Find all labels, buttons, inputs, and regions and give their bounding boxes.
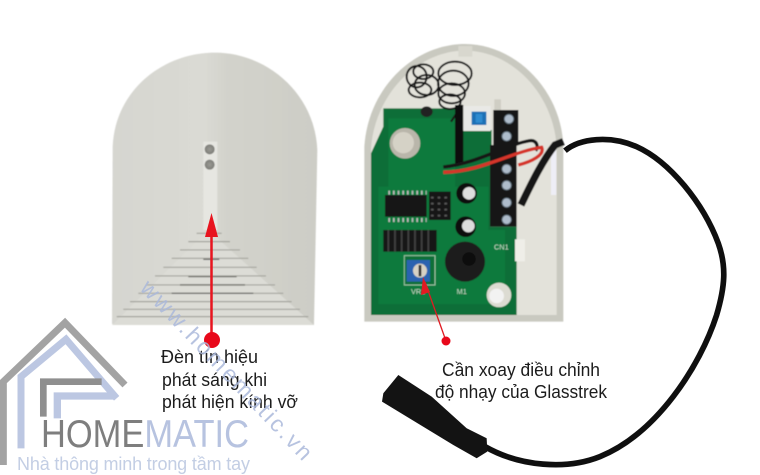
right side clip (515, 239, 525, 261)
mounting hole (487, 283, 511, 307)
top clip (458, 46, 472, 57)
board label M1: M1 (457, 287, 467, 296)
cover body (112, 53, 317, 325)
board label CN1: CN1 (494, 242, 509, 251)
text: sensitivity dial caption: độ nhạy của Glasstrek (435, 382, 608, 402)
sensitivity potentiometer (404, 256, 435, 285)
red arrow to the sensitivity dial (421, 277, 450, 346)
outer shell (364, 44, 563, 322)
main chip (385, 193, 427, 220)
board label VR1: VR1 (411, 287, 425, 296)
text: signal light caption: phát hiện kính vỡ (162, 392, 298, 412)
logo: Homematic house mark (3, 323, 125, 465)
logo: tagline: Nhà thông minh trong tầm tay (17, 454, 250, 474)
text: signal light caption: Đèn tín hiệu (161, 347, 258, 367)
terminal blocks (490, 110, 518, 227)
device: opened sensor with circuit board (364, 44, 563, 322)
LED slot (203, 142, 217, 230)
small transistor (421, 106, 433, 117)
sound vents (112, 230, 314, 325)
text: signal light caption (161, 347, 298, 412)
metal crystal can (390, 128, 420, 159)
green circuit board (371, 108, 517, 315)
black cable (485, 139, 724, 465)
device: front cover of the glass break sensor (112, 53, 317, 325)
text: signal light caption: phát sáng khi (162, 370, 267, 390)
capacitors (455, 183, 477, 237)
lower board panel (378, 187, 505, 304)
cable with DC connector (382, 139, 724, 465)
antenna coils (407, 62, 472, 122)
buzzer (445, 242, 485, 282)
inner shell (371, 51, 557, 315)
red and black wires (443, 141, 542, 172)
long pin header (383, 230, 437, 252)
logo: Homematic wordmark: HOMEMATIC (41, 413, 249, 456)
DC jack connector (382, 375, 487, 458)
switch (455, 99, 501, 163)
upper board panel (388, 118, 455, 188)
signal LEDs (205, 144, 215, 170)
red arrow to the signal LEDs (204, 213, 220, 348)
pin header (429, 192, 451, 220)
cable entry into housing (521, 142, 563, 205)
side slot highlight (551, 147, 556, 195)
text: sensitivity dial caption: Cần xoay điều chỉnh (442, 360, 600, 380)
text: sensitivity dial caption (435, 360, 608, 402)
watermark: website address: www.homematic.vn (135, 274, 318, 465)
